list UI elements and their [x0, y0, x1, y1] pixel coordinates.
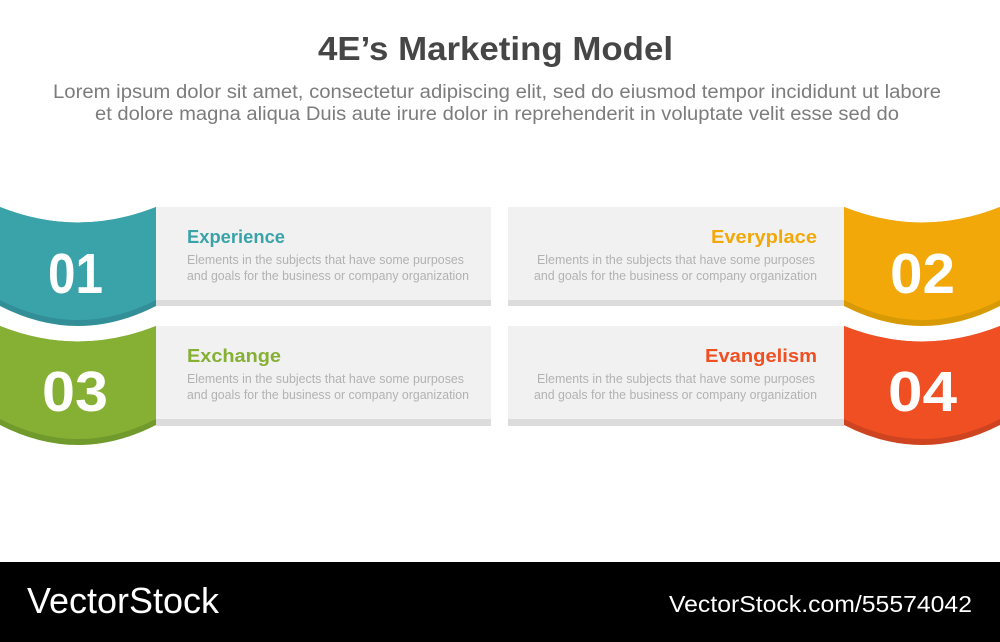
panel: 03 Exchange [0, 326, 491, 445]
subtitle text block: et dolore magna aliqua Duis aute irure dolor in reprehenderit in voluptate velit esse sed do [95, 104, 899, 125]
number 02: 02 [890, 242, 955, 306]
description 01: Elements in the subjects that have some purposes [187, 253, 464, 267]
number 04: 04 [888, 360, 957, 424]
description 02: and goals for the business or company organization [534, 269, 817, 283]
panel: 04 Evangelism [508, 326, 1000, 445]
description 02 [534, 253, 817, 283]
number 01: 01 [48, 242, 103, 306]
panel: 02 Everyplace [508, 207, 1000, 326]
description 04 [534, 372, 817, 402]
subtitle text block: Lorem ipsum dolor sit amet, consectetur adipiscing elit, sed do eiusmod tempor incididunt ut labore [53, 82, 941, 103]
description 04: Elements in the subjects that have some purposes [537, 372, 815, 386]
description 03 [187, 372, 469, 402]
footer image id: VectorStock.com/55574042 [669, 591, 972, 617]
description 03: Elements in the subjects that have some purposes [187, 372, 464, 386]
footer bar [0, 562, 1000, 642]
description 02: Elements in the subjects that have some purposes [537, 253, 815, 267]
heading: Everyplace: Everyplace [711, 227, 817, 247]
text card 01 [156, 207, 491, 306]
ribbon badge 03 [0, 326, 156, 445]
ribbon badge 01 [0, 207, 156, 326]
heading: Exchange: Exchange [187, 346, 281, 366]
heading: Evangelism: Evangelism [705, 346, 817, 366]
panel: 01 Experience [0, 207, 491, 326]
ribbon badge 02 [844, 207, 1000, 326]
text card 02 [508, 207, 844, 306]
title: 4E’s Marketing Model [318, 30, 673, 67]
subtitle text block [53, 82, 941, 125]
footer logo text: VectorStock [27, 580, 220, 621]
description 01: and goals for the business or company organization [187, 269, 469, 283]
description 04: and goals for the business or company organization [534, 388, 817, 402]
text card 03 [156, 326, 491, 426]
number 03: 03 [42, 360, 108, 424]
heading: Experience: Experience [187, 227, 285, 247]
description 03: and goals for the business or company organization [187, 388, 469, 402]
ribbon badge 04 [844, 326, 1000, 445]
description 01 [187, 253, 469, 283]
text card 04 [508, 326, 844, 426]
